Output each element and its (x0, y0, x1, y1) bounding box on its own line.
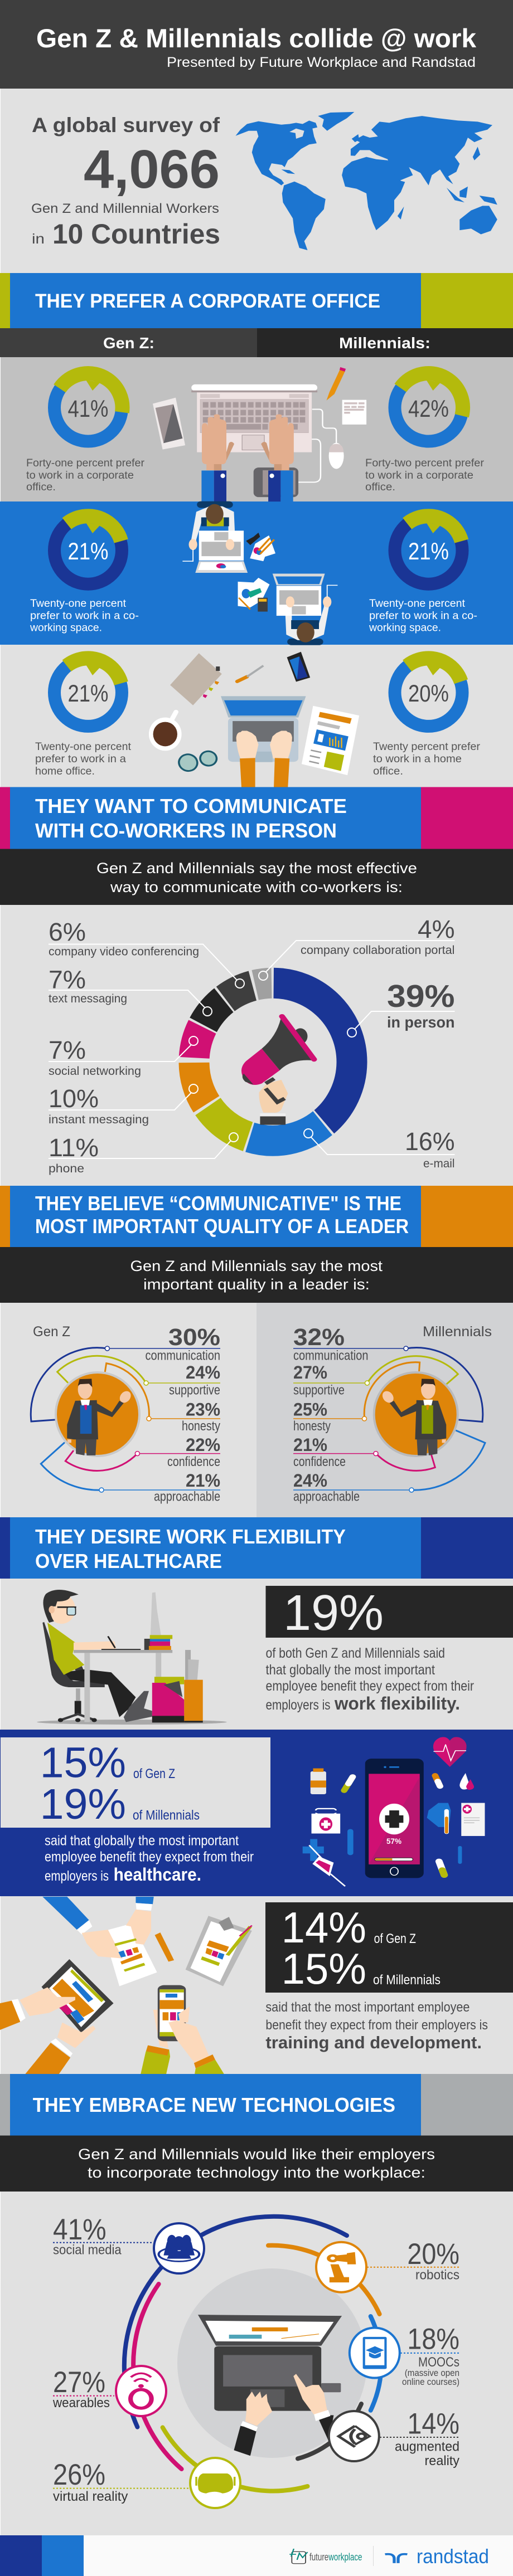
icon: papers one (246, 533, 275, 561)
panel: work flexibility stat (1, 1579, 513, 1730)
list: Gen Z qualities: supportive (169, 1383, 220, 1397)
text: Gen Z co-working description: working space. (30, 622, 102, 634)
panel: corporate office (1, 357, 513, 501)
text block: survey headline: Gen Z and Millennial Workers (31, 201, 219, 216)
text: Gen Z co-working description: prefer to work in a co- (30, 610, 139, 622)
label: Gen Z: Gen Z (33, 1324, 70, 1340)
heading: communicative leader (0, 1186, 513, 1247)
list: Millennials qualities: 25% (293, 1400, 327, 1420)
title banner (0, 0, 513, 89)
label: social networking: social networking (49, 1065, 141, 1078)
icon: social media (154, 2223, 204, 2273)
label: company video conferencing: company video conferencing (49, 946, 199, 958)
icon: MOOCs (350, 2328, 400, 2378)
heading: corporate office: THEY PREFER A CORPORATE OFFICE (35, 290, 380, 312)
text: Millennials home description: Twenty percent prefer (373, 741, 481, 753)
icon: augmented reality (329, 2411, 379, 2461)
icon: virtual reality (190, 2458, 240, 2508)
list: Millennials qualities: 32% (293, 1324, 345, 1351)
text: healthcare description: healthcare. (114, 1864, 201, 1884)
arcs and connectors (31, 1346, 220, 1492)
illustration: co-workers at shared table (182, 501, 337, 645)
logo: future workplace (289, 2549, 362, 2564)
label: Millennials: Millennials (423, 1324, 492, 1340)
heading: work flexibility (0, 1517, 513, 1579)
list: Gen Z qualities: 24% (186, 1362, 220, 1382)
icon: papers two (238, 578, 269, 612)
label: phone: 11% (49, 1133, 99, 1162)
text band: technology question (0, 2135, 513, 2192)
panel: communication donut chart (1, 905, 513, 1186)
heading: communicate in person: WITH CO-WORKERS IN PERSON (35, 819, 337, 842)
text: Millennials corporate description (365, 457, 485, 493)
label: text messaging: text messaging (49, 992, 127, 1005)
list: Gen Z qualities: approachable (154, 1489, 220, 1504)
label: e-mail: 16% (405, 1127, 455, 1156)
donut: Gen Z co-working 21% (40, 502, 136, 598)
leader lines (49, 941, 455, 1158)
stat box: 14% and 15%: 14% (282, 1903, 366, 1952)
text: Gen Z co-working description: Twenty-one percent (30, 598, 127, 610)
stat box: 14% and 15%: 15% (282, 1944, 366, 1993)
donut: Gen Z home 21%: 21% (68, 680, 108, 707)
text band: technology question: to incorporate technology into the workplace: (88, 2164, 425, 2181)
text: training description: said that the most important employee (265, 2000, 470, 2015)
donut: Gen Z home 21% (40, 644, 136, 741)
donut: Millennials home 20%: 20% (408, 680, 449, 707)
label: robotics 20%: 20% (407, 2238, 459, 2271)
illustration: laptop and hands on corporate desk (153, 367, 366, 501)
donut: Millennials co-working 21% (380, 502, 477, 598)
text band: communication question (0, 849, 513, 905)
label: wearables 27%: 27% (53, 2366, 105, 2399)
stat box: 15% and 19% (1, 1737, 270, 1828)
label: social media 41% (53, 2213, 153, 2258)
heading: work flexibility: OVER HEALTHCARE (35, 1550, 222, 1572)
label: company video conferencing: 6% (49, 918, 86, 946)
label: text messaging: 7% (49, 965, 86, 994)
text: flexibility description (265, 1645, 474, 1713)
list: Gen Z qualities: 23% (186, 1400, 220, 1420)
icon: robotics (316, 2242, 366, 2292)
icon: Millennial leader (374, 1372, 458, 1456)
list: Gen Z qualities: 30% (168, 1324, 220, 1351)
arcs and connectors (293, 1346, 485, 1492)
label: social networking: 7% (49, 1036, 86, 1064)
text band: leader question: important quality in a leader is: (143, 1276, 370, 1293)
text: healthcare description: employers is (45, 1868, 109, 1884)
donut chart (162, 951, 384, 1173)
text: Gen Z corporate description: to work in a corporate (26, 470, 134, 481)
text: Gen Z home description: prefer to work in a (35, 753, 126, 765)
panel: healthcare stat (0, 1730, 513, 1896)
text: Millennials co-working description: prefer to work in a co- (369, 610, 477, 622)
logo: future workplace: futureworkplace (309, 2551, 362, 2563)
list: Gen Z qualities: 22% (186, 1435, 220, 1455)
list: Millennials qualities: communication (293, 1348, 368, 1363)
stat box: 14% and 15%: of Gen Z (374, 1931, 416, 1946)
label: phone: phone (49, 1162, 84, 1175)
list: Millennials qualities: confidence (293, 1454, 346, 1469)
label: company video conferencing (49, 918, 199, 958)
donut: Millennials corporate 42%: 42% (408, 396, 449, 422)
text band: technology question: Gen Z and Millennials would like their employers (78, 2146, 435, 2163)
list: Millennials qualities: 27% (293, 1362, 327, 1382)
illustration: home office desk (149, 652, 359, 787)
label: virtual reality 26% (53, 2458, 188, 2504)
text: Millennials corporate description: office. (365, 481, 395, 493)
panel: training and development stat (0, 1896, 513, 2074)
label: company collaboration portal: company collaboration portal (301, 944, 455, 957)
panel: global survey intro (1, 89, 513, 273)
label: augmented reality 14%: 14% (407, 2407, 459, 2441)
donut: Gen Z corporate 41% (41, 360, 135, 455)
label: in person (387, 978, 455, 1031)
donut: Millennials corporate 42% (381, 360, 476, 455)
donut: Gen Z corporate 41%: 41% (68, 396, 108, 422)
list: Gen Z qualities: communication (145, 1348, 220, 1363)
text: healthcare description: employee benefit they expect from their (45, 1849, 254, 1864)
heading: work flexibility: THEY DESIRE WORK FLEXIBILITY (35, 1525, 346, 1548)
donut: Gen Z co-working 21%: 21% (68, 538, 108, 565)
column headers (0, 328, 513, 357)
icon: world map (235, 112, 497, 250)
text block: survey headline: in (32, 231, 45, 247)
label: wearables 27%: wearables (52, 2395, 110, 2411)
label: e-mail: e-mail (423, 1157, 455, 1170)
text block: survey headline (31, 114, 220, 250)
title banner: Gen Z & Millennials collide @ work (36, 23, 477, 53)
text band: leader question (0, 1247, 513, 1303)
text: Gen Z corporate description: office. (26, 481, 56, 493)
text: Gen Z corporate description: Forty-one percent prefer (26, 457, 145, 469)
list: Millennials qualities: approachable (293, 1489, 360, 1504)
label: virtual reality 26%: virtual reality (53, 2489, 128, 2504)
donut: Millennials home 20% (380, 644, 477, 741)
text: training description (265, 2000, 488, 2052)
illustration: man at desk (37, 1590, 227, 1725)
heading: communicative leader: THEY BELIEVE “COMMUNICATIVE" IS THE (35, 1192, 401, 1215)
text: Millennials corporate description: to work in a corporate (365, 470, 473, 481)
footer (0, 2535, 513, 2576)
label: virtual reality 26%: 26% (53, 2458, 105, 2491)
label: instant messaging: 10% (49, 1084, 99, 1113)
label: instant messaging: instant messaging (49, 1113, 149, 1126)
label: augmented reality 14%: reality (425, 2453, 459, 2468)
label: instant messaging (49, 1084, 149, 1126)
stat box: 15% and 19%: of Millennials (133, 1808, 200, 1823)
text block: survey headline: A global survey of (32, 114, 220, 137)
text block: survey headline: 10 Countries (52, 218, 220, 250)
list: Gen Z qualities: confidence (167, 1454, 220, 1469)
stat box: 14% and 15% (265, 1902, 513, 1993)
stat box: 15% and 19%: of Gen Z (133, 1766, 175, 1781)
text: flexibility description: work flexibility. (334, 1693, 460, 1713)
stat box: 14% and 15%: of Millennials (373, 1973, 441, 1988)
list: Millennials qualities: supportive (293, 1383, 345, 1397)
text: Millennials co-working description: working space. (369, 622, 441, 634)
text: Millennials home description: to work in a home (373, 753, 462, 765)
label: MOOCs 18%: online courses) (402, 2377, 459, 2387)
label: augmented reality 14%: augmented (395, 2439, 459, 2454)
text: Millennials co-working description: Twenty-one percent (369, 598, 466, 610)
list: Millennials qualities: 24% (293, 1470, 327, 1491)
logo: randstad: randstad (417, 2545, 489, 2568)
label: MOOCs 18%: (massive open (405, 2368, 459, 2378)
column headers: Gen Z: (103, 334, 154, 352)
icon: co-worker two (273, 573, 337, 645)
label: MOOCs 18% (400, 2323, 459, 2387)
text: Gen Z corporate description (26, 457, 145, 493)
text: flexibility description: employee benefit they expect from their (265, 1678, 474, 1694)
list: Millennials qualities (293, 1324, 368, 1504)
text: training description: benefit they expect from their employers is (265, 2018, 488, 2033)
label: phone (49, 1133, 99, 1175)
text band: leader question: Gen Z and Millennials say the most (130, 1258, 383, 1274)
label: e-mail (405, 1127, 455, 1170)
label: social media 41%: social media (53, 2243, 122, 2258)
text: Millennials co-working description (369, 598, 477, 634)
list: Gen Z qualities: 21% (186, 1470, 220, 1491)
text: Gen Z home description (35, 741, 132, 777)
text: Millennials home description (373, 741, 481, 777)
icon: co-worker one (182, 501, 248, 573)
label: in person: in person (387, 1014, 455, 1031)
heading: new technologies: THEY EMBRACE NEW TECHNOLOGIES (33, 2093, 395, 2116)
label: text messaging (49, 965, 127, 1005)
heading: communicate in person (0, 787, 513, 849)
stat box: 19% (265, 1585, 513, 1641)
icon: megaphone (241, 1016, 314, 1125)
text band: communication question: Gen Z and Millennials say the most effective (96, 860, 417, 876)
label: MOOCs 18%: MOOCs (418, 2355, 459, 2370)
text: Millennials home description: office. (373, 766, 403, 777)
icon: Gen Z leader (56, 1372, 139, 1456)
central circle (177, 2268, 367, 2458)
list: Millennials qualities: 21% (293, 1435, 327, 1455)
text band: communication question: way to communicate with co-workers is: (110, 879, 403, 895)
panel: new technologies chart (1, 2192, 513, 2535)
list: Gen Z qualities (145, 1324, 220, 1504)
text block: survey headline: 4,066 (84, 139, 220, 199)
column headers: Millennials: (339, 334, 430, 352)
label: robotics 20% (367, 2238, 459, 2283)
label: in person: 39% (387, 978, 455, 1014)
heading: corporate office (0, 273, 513, 328)
list: Gen Z qualities: honesty (182, 1419, 220, 1434)
illustration: medical phone and icons (303, 1737, 485, 1886)
panel: home office (1, 644, 513, 787)
text: healthcare description (45, 1833, 254, 1884)
text: training description: training and development. (265, 2033, 482, 2052)
label: MOOCs 18%: 18% (407, 2323, 459, 2356)
label: 57% on phone: 57% (386, 1837, 402, 1845)
illustration: laptop with hands (198, 2315, 342, 2456)
panel: co-working (0, 501, 513, 645)
icon: wearables (116, 2366, 166, 2416)
text: Millennials corporate description: Forty-two percent prefer (365, 457, 485, 469)
stat box: 19%: 19% (283, 1585, 384, 1641)
panel: Millennials leader qualities (256, 1303, 513, 1517)
text: Gen Z home description: home office. (35, 766, 95, 777)
illustration: hands with tablets and documents (0, 1897, 252, 2074)
heading: new technologies (0, 2074, 513, 2135)
label: company collaboration portal: 4% (418, 915, 455, 943)
text: healthcare description: said that globally the most important (45, 1833, 239, 1849)
text: Gen Z co-working description (30, 598, 139, 634)
label: robotics 20%: robotics (415, 2268, 459, 2283)
label: social media 41%: 41% (53, 2213, 107, 2246)
heading: communicate in person: THEY WANT TO COMMUNICATE (35, 795, 347, 817)
stat box: 15% and 19%: 15% (40, 1739, 126, 1787)
text: flexibility description: that globally the most important (265, 1662, 435, 1678)
ring arcs (124, 2217, 381, 2491)
list: Millennials qualities: honesty (293, 1419, 331, 1434)
label: social networking (49, 1036, 141, 1078)
title banner: Presented by Future Workplace and Randstad (167, 55, 476, 70)
label: augmented reality 14% (380, 2407, 459, 2468)
text: flexibility description: of both Gen Z and Millennials said (265, 1645, 445, 1661)
donut: Millennials co-working 21%: 21% (408, 538, 449, 565)
panel: Gen Z leader qualities (1, 1303, 256, 1517)
stat box: 15% and 19%: 19% (40, 1780, 126, 1828)
label: company collaboration portal (301, 915, 455, 957)
heading: communicative leader: MOST IMPORTANT QUALITY OF A LEADER (35, 1215, 409, 1238)
logo: randstad (385, 2545, 489, 2568)
text: Gen Z home description: Twenty-one percent (35, 741, 132, 753)
text: flexibility description: employers is (265, 1697, 330, 1713)
